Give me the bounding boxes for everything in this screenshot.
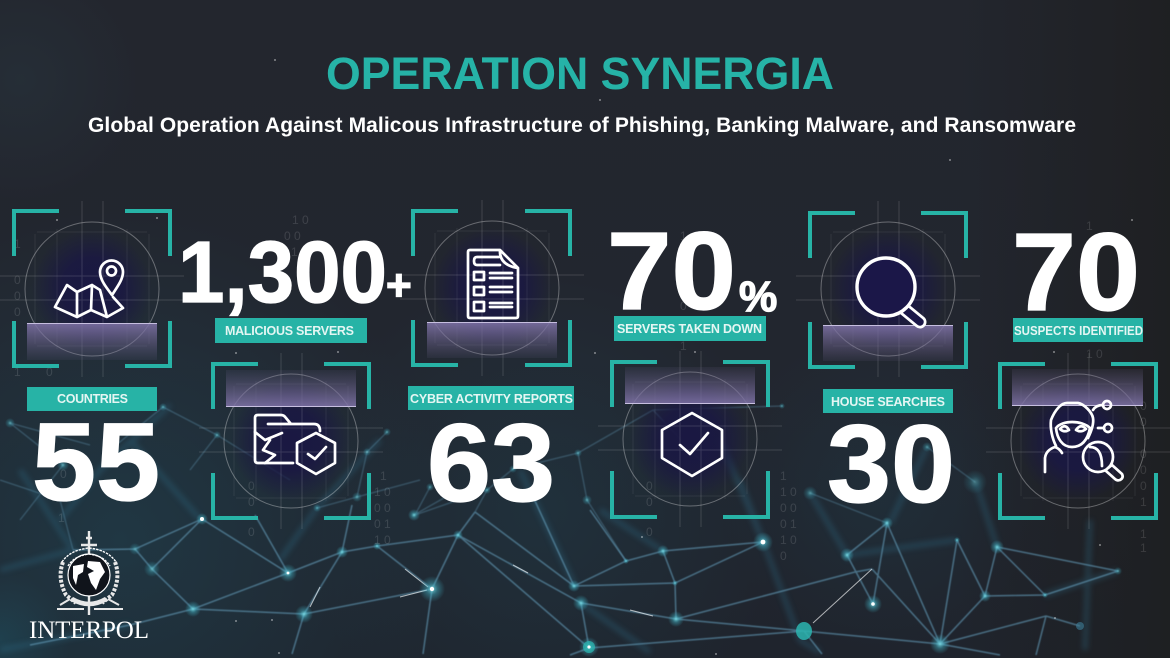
faint binary digits: 0 (248, 495, 255, 509)
faint binary digits: 0 (1140, 415, 1147, 429)
faint binary digits: 0 0 (374, 501, 391, 515)
frame and magnifier icon block (796, 201, 980, 377)
icon: checklist document (468, 250, 518, 318)
faint binary digits: 0 (1140, 463, 1147, 477)
faint binary digits: 1 0 (374, 485, 391, 499)
subtitle: Global Operation Against Malicous Infrastructure of Phishing, Banking Malware, and Ransomware (88, 114, 1076, 137)
faint binary digits: 1 (58, 511, 65, 525)
faint binary digits: 0 1 (780, 517, 797, 531)
number: 63: 63 (427, 402, 555, 525)
frame and document icon block (400, 200, 584, 376)
icon: magnifying glass (857, 258, 920, 322)
faint binary digits: 0 1 (374, 517, 391, 531)
panel: suspects identified (986, 211, 1170, 529)
title: OPERATION SYNERGIA (326, 48, 834, 99)
number: 70%: 70 (607, 210, 736, 333)
faint binary digits: 0 (1086, 289, 1093, 303)
faint binary digits: 1 (1140, 541, 1147, 555)
faint binary digits: 1 (1140, 527, 1147, 541)
faint binary digits: 0 (60, 467, 67, 481)
panel: servers taken down (598, 210, 782, 527)
faint binary digits: 1 0 (780, 533, 797, 547)
number: 30: 30 (827, 403, 955, 526)
frame and hacker icon block (986, 353, 1170, 529)
faint binary digits: 1 (14, 237, 21, 251)
icon: shield with check (662, 413, 722, 476)
network of connected nodes (0, 405, 1118, 655)
faint binary digits: 1 (680, 229, 687, 243)
label: cyber activity reports (408, 386, 574, 410)
faint binary digits: 1 (780, 469, 787, 483)
network nodes (5, 403, 1122, 657)
faint binary digits: 0 (14, 305, 21, 319)
faint binary digits: 0 0 (284, 229, 301, 243)
faint binary digits: 0 (646, 525, 653, 539)
frame and shield icon block (598, 351, 782, 527)
faint binary digits: 1 (680, 339, 687, 353)
label: house searches: HOUSE SEARCHES (831, 395, 945, 409)
faint binary digits: 0 (1140, 447, 1147, 461)
faint binary digits: 0 (680, 299, 687, 313)
number: 1,300+: + (386, 261, 412, 310)
number: 70%: % (739, 273, 777, 321)
globe (68, 554, 110, 596)
frame and folder icon block (199, 353, 383, 529)
faint binary digits: 0 0 (780, 501, 797, 515)
logo: INTERPOL emblem and wordmark (29, 531, 149, 644)
number: 55: 55 (32, 401, 160, 524)
faint binary digits (14, 213, 1147, 563)
faint binary digits: 0 (14, 273, 21, 287)
faint binary digits: 0 (646, 479, 653, 493)
label: countries: COUNTRIES (57, 392, 128, 406)
faint binary digits: 1 (380, 469, 387, 483)
faint binary digits: 1 0 (1086, 347, 1103, 361)
emblem ring and laurels (62, 548, 116, 566)
faint binary digits: 1 0 (374, 533, 391, 547)
label: countries (27, 387, 157, 411)
panel: cyber activity reports (400, 200, 584, 525)
faint binary digits: 0 (248, 479, 255, 493)
label: malicious servers: MALICIOUS SERVERS (225, 324, 354, 338)
wordmark: INTERPOL (29, 617, 149, 644)
number: 70: 70 (1012, 211, 1140, 334)
label: servers taken down: SERVERS TAKEN DOWN (617, 322, 762, 336)
label: malicious servers (215, 318, 367, 343)
frame and map icon block (0, 201, 184, 377)
faint binary digits: 1 (1140, 495, 1147, 509)
icon: folder with shield (255, 415, 335, 474)
panel: house searches (796, 201, 980, 526)
faint binary digits: 1 (1086, 219, 1093, 233)
number: 1,300+: 1,300 (178, 224, 387, 321)
label: suspects identified (1013, 318, 1143, 342)
faint binary digits: 0 (46, 365, 53, 379)
faint binary digits: 0 (248, 525, 255, 539)
faint binary digits: 0 (780, 549, 787, 563)
panel: countries (0, 201, 184, 524)
faint binary digits: 0 (646, 495, 653, 509)
faint binary digits: 0 (1140, 479, 1147, 493)
faint binary digits: 1 0 (780, 485, 797, 499)
label: cyber activity reports: CYBER ACTIVITY REPORTS (410, 392, 573, 406)
label: servers taken down (614, 316, 766, 341)
icon: hacker with magnifier (1045, 401, 1123, 480)
sword (81, 531, 97, 615)
faint binary digits: 0 (14, 289, 21, 303)
faint binary digits: 1 0 (292, 213, 309, 227)
faint binary digits: 1 (291, 245, 298, 259)
panel: malicious servers (178, 224, 412, 529)
faint binary digits: 1 (14, 365, 21, 379)
label: suspects identified: SUSPECTS IDENTIFIED (1014, 324, 1143, 338)
icon: map with pin (55, 260, 123, 317)
faint binary digits: 0 (1140, 399, 1147, 413)
label: house searches (823, 389, 953, 413)
